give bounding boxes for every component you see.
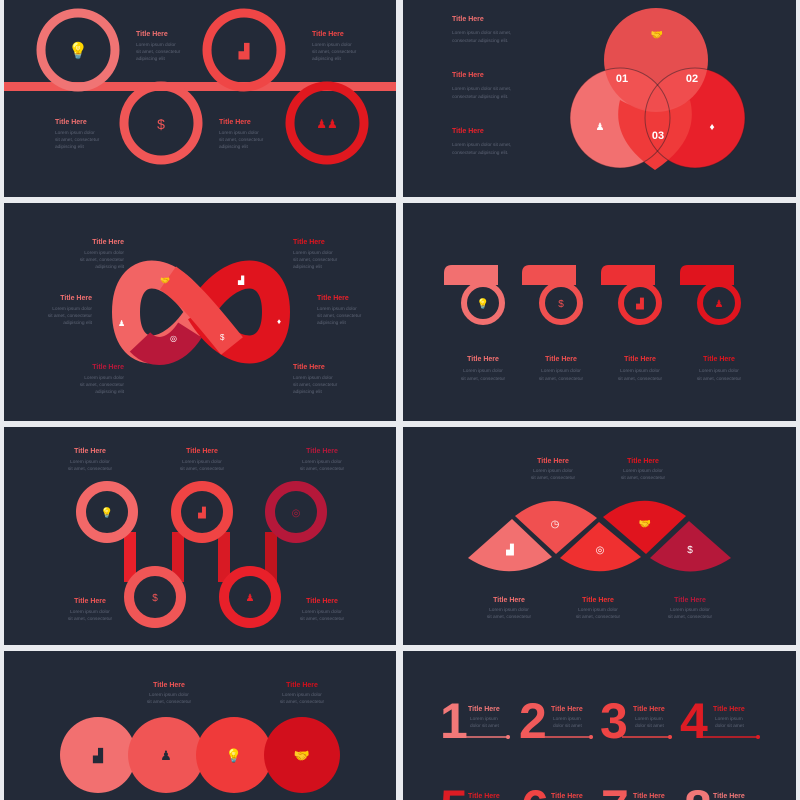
panel: loop timeline: Title Here (219, 119, 251, 126)
panel: infinity: Lorem ipsum dolor (293, 250, 333, 256)
panel: infinity: adipiscing elit (63, 320, 93, 326)
panel: scroll tabs: Lorem ipsum dolor (699, 368, 739, 374)
connectors (124, 532, 277, 582)
panel: snake rings: Title Here (306, 598, 338, 605)
panel: snake rings: Title Here (74, 598, 106, 605)
panel: numbered list: 1 (440, 693, 468, 749)
panel: snake rings: Lorem ipsum dolor (70, 459, 110, 465)
panel: loop timeline: Lorem ipsum dolor (219, 130, 259, 136)
panel: snake rings (4, 427, 396, 645)
panel: numbered list: Title Here (468, 706, 500, 713)
panel: circles row (4, 651, 396, 800)
panel: numbered list: Title Here (633, 706, 665, 713)
panel: infinity: sit amet, consectetur (317, 313, 362, 319)
ring 2: ▟ (238, 42, 250, 60)
rings: ▟ (197, 506, 206, 519)
ring 2 (207, 13, 281, 87)
panel: circles row: Lorem ipsum dolor (282, 692, 322, 698)
panel: circles row: 💡 (226, 748, 242, 763)
panel: circles row: sit amet, consectetur (147, 699, 192, 705)
panel: scroll tabs: sit amet, consectetur (539, 376, 584, 382)
panel: snake rings: Title Here (306, 448, 338, 455)
panel: scroll tabs: Title Here (703, 356, 735, 363)
text blocks: adipiscing elit (136, 56, 165, 62)
panel: infinity: Title Here (317, 295, 349, 302)
panel: venn: consectetur adipiscing elit. (452, 94, 508, 100)
ring 3 (124, 86, 198, 160)
panel: infinity: adipiscing elit (95, 264, 125, 270)
panel: wave segments: Title Here (493, 597, 525, 604)
panel: numbered list: dolor sit amet (553, 723, 582, 729)
rings: 💡 (101, 506, 113, 519)
infinity shape: ◎ (170, 334, 177, 343)
panel: infinity: adipiscing elit (317, 320, 346, 326)
venn circles: 02 (686, 73, 698, 85)
panel: wave segments: Lorem ipsum dolor (533, 468, 573, 474)
panel: infinity: adipiscing elit (293, 264, 322, 270)
panel: scroll tabs: $ (558, 299, 564, 310)
infinity shape (118, 274, 281, 351)
panel: numbered list: Title Here (551, 706, 583, 713)
panel: circles row: 🤝 (294, 748, 310, 763)
panel: scroll tabs: sit amet, consectetur (461, 376, 506, 382)
text blocks: Title Here (136, 31, 168, 38)
panel: loop timeline: adipiscing elit (312, 56, 341, 62)
panel: infinity: sit amet, consectetur (293, 382, 338, 388)
rings: $ (152, 593, 158, 604)
panel: numbered list: Title Here (468, 793, 500, 800)
infinity shape: ♦ (277, 317, 281, 326)
panel: infinity: Lorem ipsum dolor (317, 306, 357, 312)
panel: scroll tabs: Lorem ipsum dolor (463, 368, 503, 374)
rings: ♟ (246, 593, 254, 604)
panel: wave segments (403, 427, 796, 645)
panel: loop timeline: adipiscing elit (219, 144, 248, 150)
rings (81, 486, 322, 623)
panel: wave segments: Title Here (627, 458, 659, 465)
panel: infinity: sit amet, consectetur (80, 257, 124, 263)
panel: infinity (4, 203, 396, 421)
panel: numbered list: dolor sit amet (715, 723, 744, 729)
panel: wave segments: Title Here (674, 597, 706, 604)
panel: venn (403, 0, 796, 197)
panel: wave segments: 🤝 (639, 519, 651, 530)
ring 4: ♟♟ (316, 117, 338, 131)
panel: numbered list: dolor sit amet (635, 723, 664, 729)
panel: loop timeline: sit amet, consectetur (55, 137, 100, 143)
panel: snake rings: sit amet, consectetur (180, 466, 225, 472)
panel: snake rings: Title Here (74, 448, 106, 455)
panel: infinity: Title Here (60, 295, 92, 302)
venn circles: 01 (616, 73, 628, 85)
panel: venn: consectetur adipiscing elit. (452, 150, 508, 156)
panel: venn: Title Here (452, 128, 484, 135)
panel: scroll tabs: ▟ (635, 297, 644, 310)
panel: circles row: ▟ (92, 747, 104, 764)
panel: snake rings: sit amet, consectetur (68, 466, 113, 472)
panel: venn: Title Here (452, 72, 484, 79)
panel: venn: Lorem ipsum dolor sit amet, (452, 30, 511, 36)
infinity shape: 🤝 (160, 276, 170, 285)
panel: circles row: Lorem ipsum dolor (149, 692, 189, 698)
panel: wave segments: Title Here (582, 597, 614, 604)
panel: scroll tabs: Lorem ipsum dolor (620, 368, 660, 374)
ring 1: 💡 (68, 41, 88, 60)
panel: infinity: adipiscing elit (95, 389, 125, 395)
panel: venn: Lorem ipsum dolor sit amet, (452, 86, 511, 92)
panel: numbered list: Title Here (633, 793, 665, 800)
panel: snake rings: Lorem ipsum dolor (302, 609, 342, 615)
panel: infinity: Title Here (92, 364, 124, 371)
panel: scroll tabs: Title Here (624, 356, 656, 363)
panel: circles row: Title Here (286, 682, 318, 689)
panel: infinity: sit amet, consectetur (48, 313, 92, 319)
venn circles: ♦ (709, 122, 715, 133)
panel: venn: Lorem ipsum dolor sit amet, (452, 142, 511, 148)
panel: infinity: Title Here (293, 364, 325, 371)
panel: wave segments: sit amet, consectetur (668, 614, 713, 620)
venn circles: ♟ (596, 122, 604, 133)
panel: infinity: sit amet, consectetur (293, 257, 338, 263)
panel: snake rings: Title Here (186, 448, 218, 455)
panel: infinity: Lorem ipsum dolor (293, 375, 333, 381)
rings: ◎ (292, 508, 301, 519)
panel: numbered list: Lorem ipsum (635, 716, 663, 722)
panel: scroll tabs: Title Here (545, 356, 577, 363)
panel: numbered list: Lorem ipsum (715, 716, 743, 722)
panel: loop timeline (4, 0, 396, 197)
panel: loop timeline: sit amet, consectetur (312, 49, 357, 55)
panel: numbered list: 2 (519, 693, 547, 749)
panel: infinity: Lorem ipsum dolor (84, 375, 124, 381)
panel: wave segments: ◎ (596, 545, 605, 556)
infinity shape: $ (220, 333, 225, 342)
panel: snake rings: sit amet, consectetur (68, 616, 113, 622)
panel: numbered list: dolor sit amet (470, 723, 499, 729)
panel: scroll tabs: Title Here (467, 356, 499, 363)
panel: loop timeline: sit amet, consectetur (219, 137, 264, 143)
panel: scroll tabs: 💡 (477, 297, 489, 310)
venn circles: 🤝 (651, 30, 663, 41)
panel: numbered list: Lorem ipsum (470, 716, 498, 722)
panel: numbered list: Title Here (551, 793, 583, 800)
panel: scroll tabs: sit amet, consectetur (618, 376, 663, 382)
horizontal band (4, 82, 396, 91)
panel: wave segments: sit amet, consectetur (531, 475, 576, 481)
panel: loop timeline: Title Here (55, 119, 87, 126)
panel: infinity: sit amet, consectetur (80, 382, 124, 388)
panel: loop timeline: Lorem ipsum dolor (55, 130, 95, 136)
panel: loop timeline: adipiscing elit (55, 144, 84, 150)
infinity shape: ▟ (237, 275, 245, 285)
panel: scroll tabs: ♟ (715, 299, 723, 310)
panel: numbered list: Title Here (713, 706, 745, 713)
panel: infinity: Lorem ipsum dolor (84, 250, 124, 256)
panel: wave segments: sit amet, consectetur (487, 614, 532, 620)
panel: snake rings: sit amet, consectetur (300, 466, 345, 472)
panel: wave segments: ◷ (551, 519, 560, 530)
panel: wave segments: Title Here (537, 458, 569, 465)
panel: wave segments: sit amet, consectetur (576, 614, 621, 620)
panel: infinity: Title Here (293, 239, 325, 246)
panel: infinity: adipiscing elit (293, 389, 322, 395)
ring 3: $ (157, 116, 165, 132)
panel: snake rings: sit amet, consectetur (300, 616, 345, 622)
panel: snake rings: Lorem ipsum dolor (70, 609, 110, 615)
panel: numbered list: Title Here (713, 793, 745, 800)
panel: scroll tabs: sit amet, consectetur (697, 376, 742, 382)
panel: wave segments: Lorem ipsum dolor (670, 607, 710, 613)
panel: venn: Title Here (452, 16, 484, 23)
panel: loop timeline: Title Here (312, 31, 344, 38)
panel: numbered list: Lorem ipsum (553, 716, 581, 722)
panel: circles row: sit amet, consectetur (280, 699, 325, 705)
panel: wave segments: sit amet, consectetur (621, 475, 666, 481)
ring 4 (290, 86, 364, 160)
text blocks: Lorem ipsum dolor (136, 42, 176, 48)
panel: snake rings: Lorem ipsum dolor (182, 459, 222, 465)
panel: numbered list (403, 651, 796, 800)
panel: wave segments: Lorem ipsum dolor (489, 607, 529, 613)
panel: infinity: Lorem ipsum dolor (52, 306, 92, 312)
panel: scroll tabs (403, 203, 796, 421)
venn circles: 03 (652, 130, 664, 142)
panel: wave segments: $ (687, 545, 693, 556)
panel: wave segments: Lorem ipsum dolor (623, 468, 663, 474)
panel: snake rings: Lorem ipsum dolor (302, 459, 342, 465)
panel: scroll tabs: Lorem ipsum dolor (541, 368, 581, 374)
panel: circles row: ♟ (160, 748, 172, 763)
panel: infinity: Title Here (92, 239, 124, 246)
panel: wave segments: Lorem ipsum dolor (578, 607, 618, 613)
panel: numbered list: 4 (680, 693, 708, 749)
panel: venn: consectetur adipiscing elit. (452, 38, 508, 44)
text blocks: sit amet, consectetur (136, 49, 181, 55)
venn circles (570, 8, 745, 170)
text blocks (136, 31, 181, 62)
panel: loop timeline: Lorem ipsum dolor (312, 42, 352, 48)
panel: numbered list: 3 (600, 693, 628, 749)
infinity shape: ♟ (118, 319, 125, 328)
panel: wave segments: ▟ (505, 543, 514, 556)
ring 1 (41, 13, 115, 87)
panel: circles row: Title Here (153, 682, 185, 689)
